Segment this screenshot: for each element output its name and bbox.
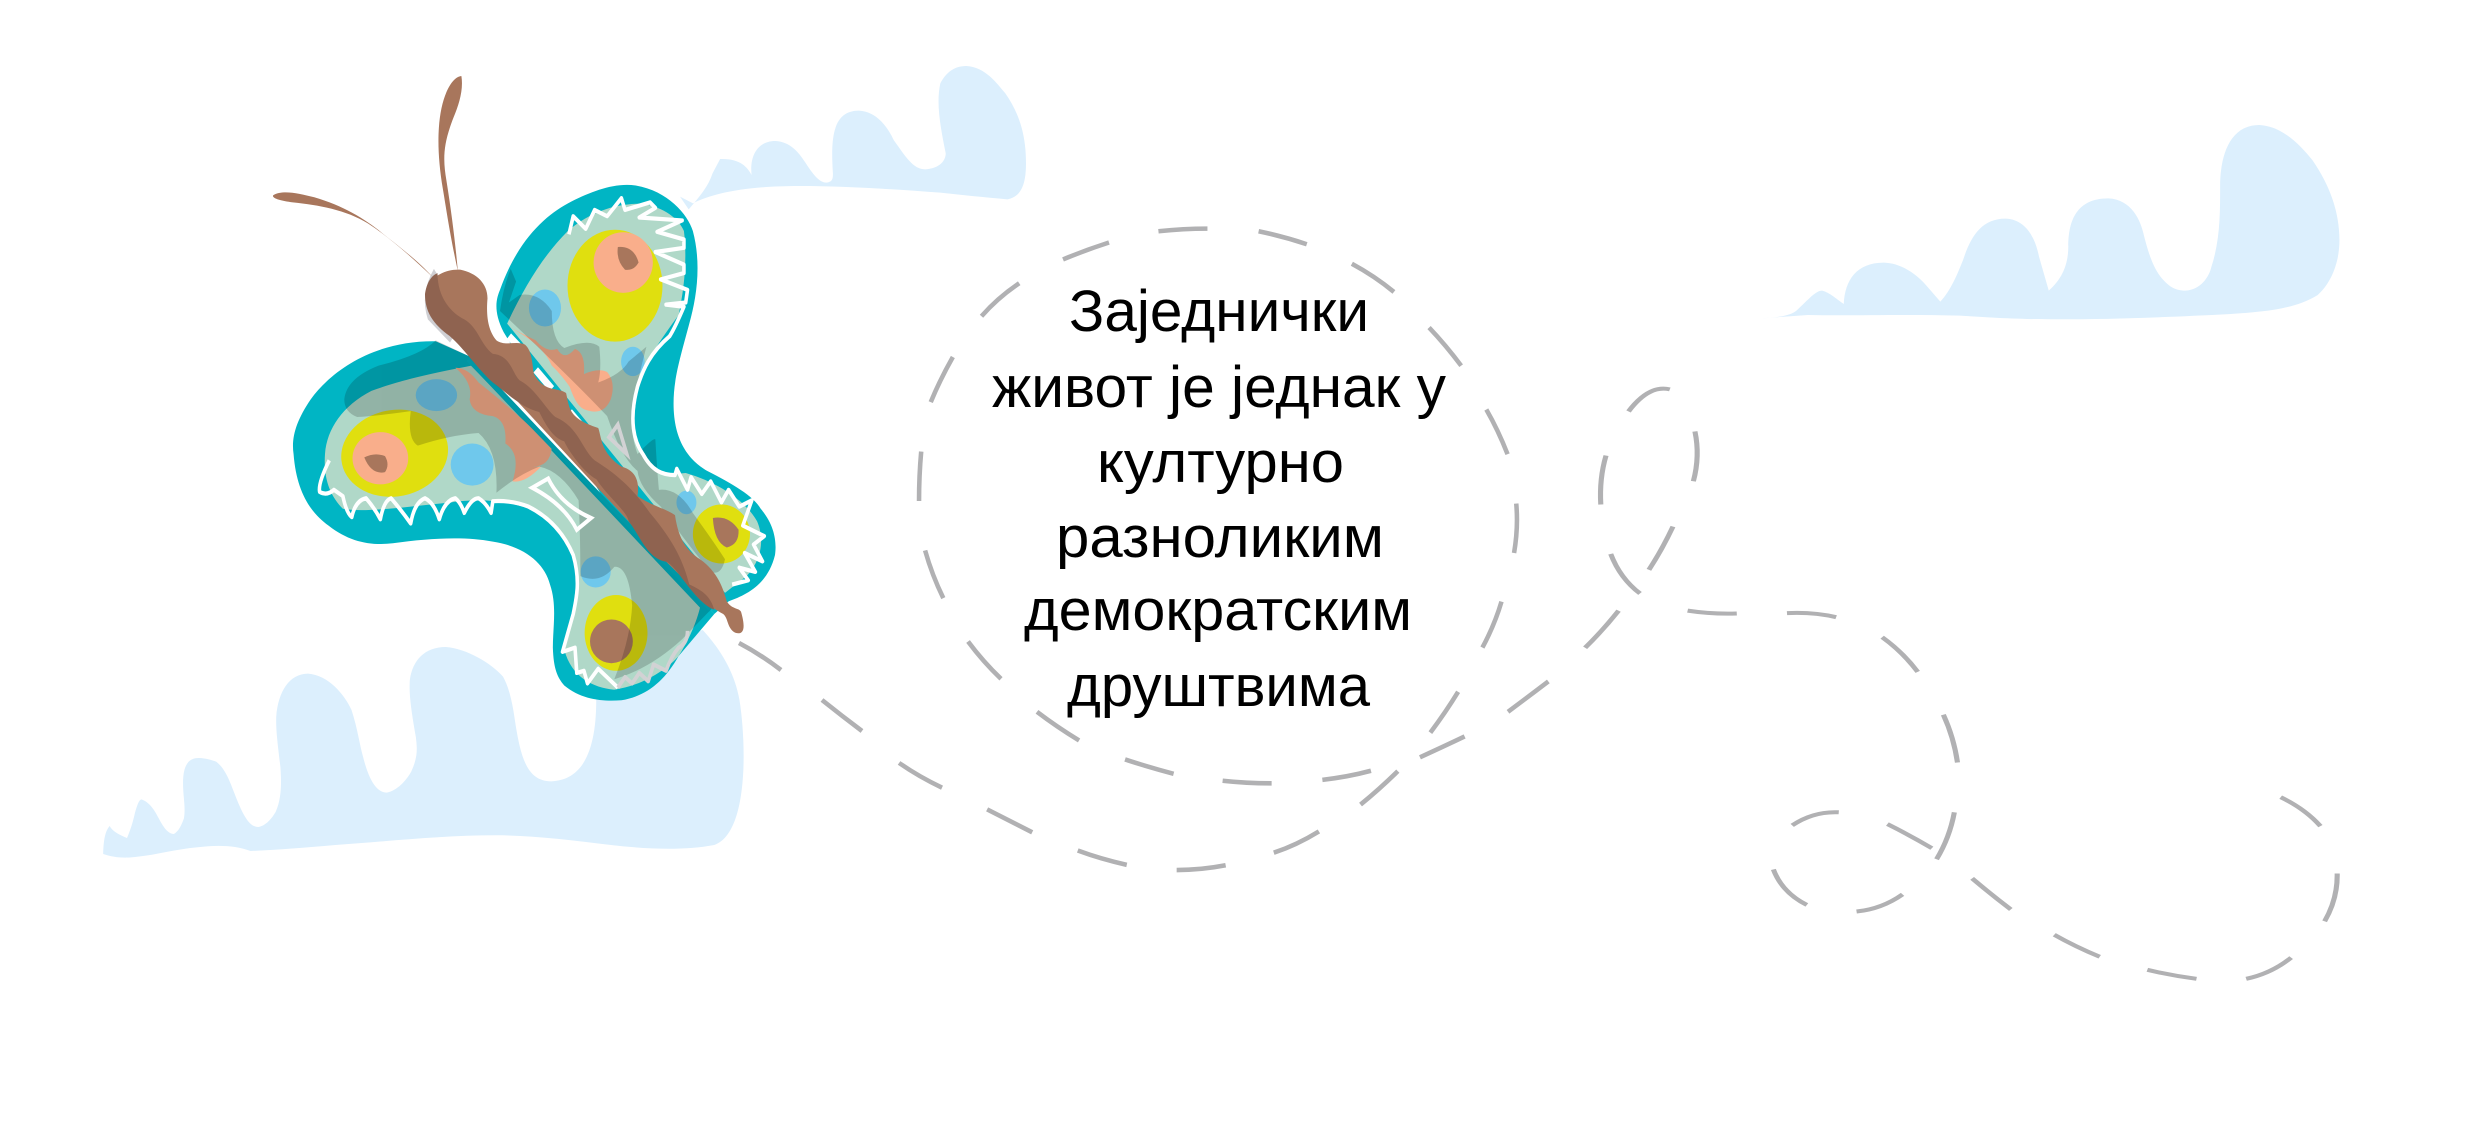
lower right wing spots (676, 491, 750, 563)
bottom wing spots (581, 556, 647, 671)
right wing: pale green inner (507, 204, 761, 593)
antenna: upper (438, 76, 462, 271)
top wing spots (529, 230, 662, 376)
left wing: teal outer (293, 341, 714, 701)
cloud: bottom left (103, 630, 744, 858)
white gaps beside body (509, 336, 584, 429)
right wing: teal outer (496, 185, 776, 614)
grey head shadow (425, 269, 464, 343)
body: dark side (425, 273, 714, 610)
left wing: pale green inner (325, 366, 700, 690)
statement text: демократским (1024, 578, 1412, 643)
white zigzag: left and bottom wing edge (319, 460, 618, 688)
statement text (992, 279, 1446, 719)
statement text: разноликим (1056, 505, 1384, 570)
dashed flight path (739, 229, 2337, 979)
translucent wing shadow (344, 269, 725, 679)
cloud: top centre (680, 66, 1026, 209)
statement text: Заједнички (1069, 279, 1369, 344)
cloud: top right (1762, 125, 2339, 319)
peach wing markings (455, 328, 613, 482)
statement text: друштвима (1067, 654, 1371, 719)
left wing spots (338, 379, 494, 503)
body: light side (429, 270, 744, 633)
teal line beside body (468, 359, 711, 610)
antenna: left (273, 192, 433, 277)
statement text: културно (1097, 430, 1344, 495)
statement text: живот је једнак у (992, 355, 1446, 420)
white wing marks (532, 425, 627, 530)
grey zigzag: bottom wing edge (618, 631, 687, 688)
white zigzag: right wing edge (569, 198, 764, 585)
icon: butterfly (273, 76, 776, 701)
